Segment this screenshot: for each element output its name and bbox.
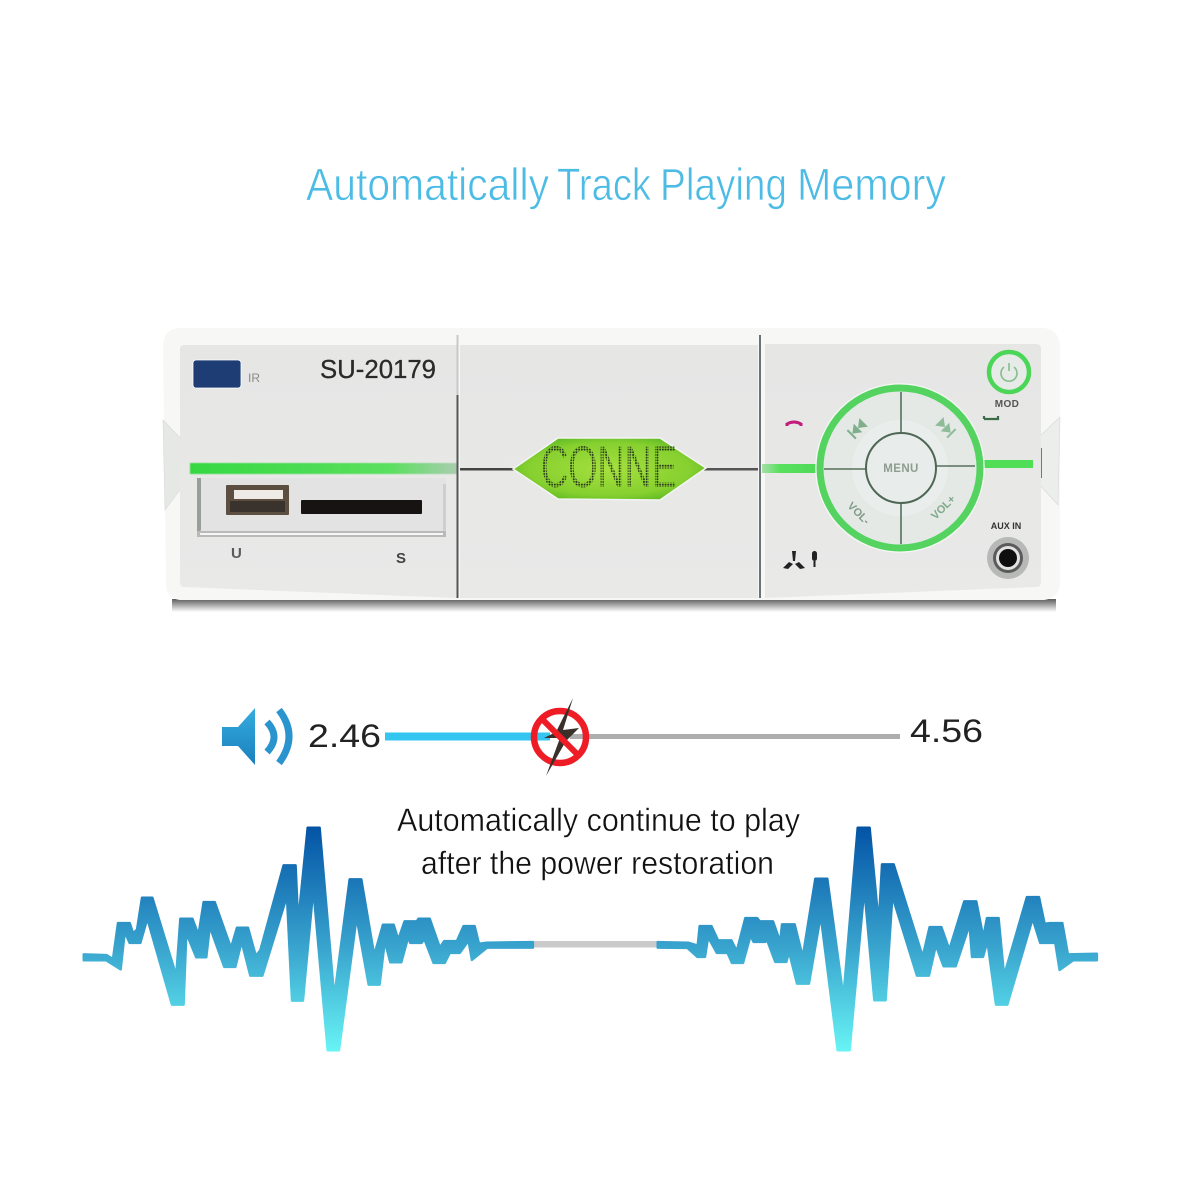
left green light strip <box>190 463 457 474</box>
AUX jack <box>987 537 1029 579</box>
MOD label: MOD <box>995 399 1019 410</box>
device outer body <box>163 328 1060 600</box>
playback progress bar <box>222 698 983 776</box>
call icon <box>787 422 801 426</box>
left panel <box>180 345 457 598</box>
card slot <box>301 500 422 514</box>
right green light strip <box>980 460 1033 468</box>
U label: U <box>231 545 242 562</box>
wheel dividers <box>824 392 975 544</box>
car stereo device <box>163 328 1060 612</box>
title: Playing <box>660 159 787 210</box>
speaker icon <box>222 708 289 765</box>
USB port <box>226 485 289 515</box>
no power icon <box>534 698 586 776</box>
S label: S <box>396 550 406 567</box>
center green light strip <box>762 464 822 473</box>
menu button <box>866 433 936 503</box>
VOL- label: VOL- <box>845 500 872 527</box>
title: Memory <box>797 159 946 210</box>
caption: after the power restoration <box>421 845 774 881</box>
right waveform <box>657 827 1097 1051</box>
panel seams <box>456 335 761 598</box>
left waveform <box>83 827 533 1051</box>
menu label: MENU <box>883 463 919 475</box>
start time: 2.46 <box>308 718 381 754</box>
IR label: IR <box>248 371 260 385</box>
left side tab <box>163 420 185 510</box>
next icon <box>935 417 956 438</box>
horizontal seam right <box>704 468 758 470</box>
title <box>306 159 946 210</box>
played bar <box>385 732 550 740</box>
model number: SU-20179 <box>320 354 436 384</box>
control wheel <box>816 384 984 552</box>
fan icon <box>783 551 805 569</box>
hang up icon <box>984 416 998 419</box>
gap line <box>533 941 658 948</box>
right side tab <box>1038 417 1060 505</box>
horizontal seam left <box>460 468 514 470</box>
device shadow <box>172 599 1056 612</box>
title: Track <box>557 159 651 210</box>
caption: Automatically continue to play <box>397 802 800 838</box>
VOL+ label: VOL+ <box>929 493 958 522</box>
caption <box>397 802 800 881</box>
end time: 4.56 <box>910 713 983 749</box>
mic icon <box>812 551 817 567</box>
IR window <box>193 360 241 388</box>
title: Automatically <box>306 159 549 210</box>
AUX IN label: AUX IN <box>991 521 1021 531</box>
port recess <box>197 478 446 537</box>
LCD text: CONNE <box>541 435 677 500</box>
remaining bar <box>570 734 900 739</box>
previous icon <box>847 418 868 439</box>
power button <box>989 352 1029 392</box>
LCD display <box>513 438 706 500</box>
right panel <box>762 344 1041 598</box>
middle panel <box>460 345 758 598</box>
